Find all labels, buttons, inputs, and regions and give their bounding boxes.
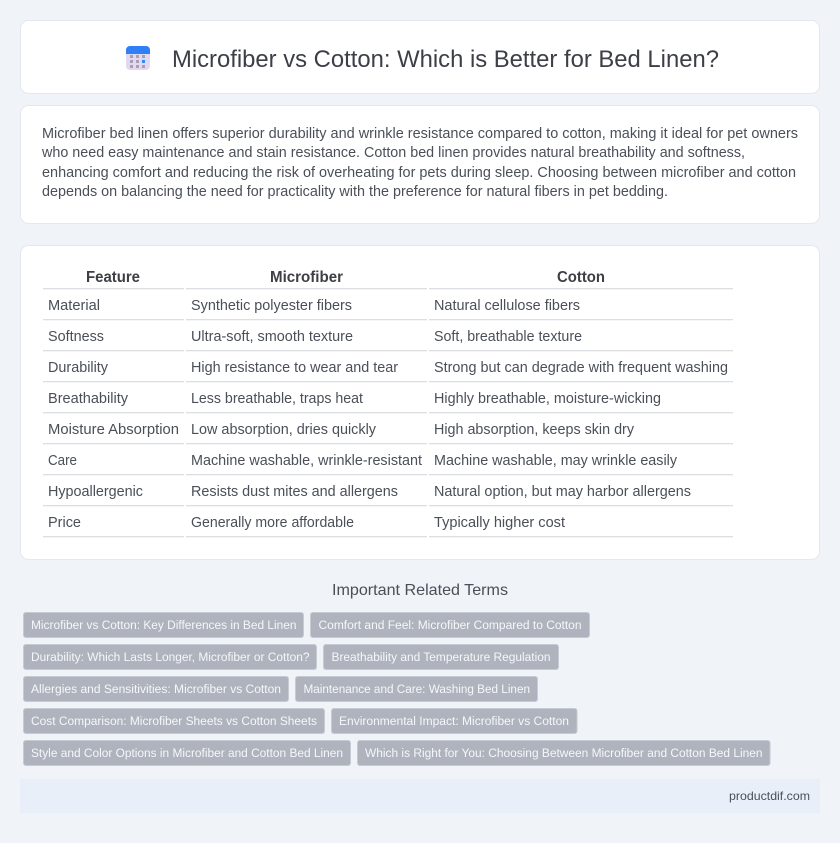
tag <box>332 708 577 734</box>
row: hypoallergenic: Hypoallergenic <box>48 484 143 500</box>
row: care <box>48 453 678 469</box>
tag <box>324 644 558 670</box>
row: breathability: Breathability <box>48 391 129 407</box>
row: durability: Strong but can degrade with frequent washing <box>434 360 728 376</box>
icon: calendar grid <box>126 46 150 70</box>
tag: Allergies and Sensitivities: Microfiber vs Cotton <box>31 682 281 696</box>
footer source: productdif.com <box>729 789 810 803</box>
row: material: Synthetic polyester fibers <box>191 298 352 314</box>
row: care: Machine washable, may wrinkle easily <box>434 453 678 469</box>
table rules <box>43 288 733 537</box>
tag <box>24 740 350 766</box>
row: material: Material <box>48 298 100 314</box>
row: durability: High resistance to wear and tear <box>191 360 398 376</box>
intro paragraph: enhancing comfort and reducing the risk of overheating for pets during sleep. Choosing between microfiber and cotton <box>42 165 796 181</box>
row: care: Machine washable, wrinkle-resistant <box>191 453 422 469</box>
row: material <box>48 298 580 314</box>
row: moisture absorption <box>48 422 635 438</box>
row: price: Generally more affordable <box>191 515 354 531</box>
row: care: Care <box>48 453 77 469</box>
row: softness: Softness <box>48 329 104 345</box>
row: moisture absorption: Moisture Absorption <box>48 422 179 438</box>
row: price <box>48 515 565 531</box>
table header: Feature <box>86 269 140 286</box>
related term tags <box>24 612 770 766</box>
tag <box>296 676 538 702</box>
row: hypoallergenic: Natural option, but may harbor allergens <box>434 484 691 500</box>
tag: Style and Color Options in Microfiber and Cotton Bed Linen <box>31 746 343 760</box>
row: durability: Durability <box>48 360 109 376</box>
row: hypoallergenic <box>48 484 691 500</box>
row: breathability: Highly breathable, moisture-wicking <box>434 391 661 407</box>
tag <box>358 740 770 766</box>
table header <box>86 269 605 286</box>
table header: Cotton <box>557 269 605 286</box>
footer bar <box>20 779 820 813</box>
row: breathability <box>48 391 661 407</box>
intro paragraph <box>41 126 798 200</box>
row: moisture absorption: Low absorption, dries quickly <box>191 422 377 438</box>
table header: Microfiber <box>270 269 343 286</box>
tag: Cost Comparison: Microfiber Sheets vs Cotton Sheets <box>31 714 317 728</box>
tag <box>24 676 288 702</box>
title: Microfiber vs Cotton: Which is Better for Bed Linen? <box>172 46 719 73</box>
tag: Which is Right for You: Choosing Between Microfiber and Cotton Bed Linen <box>365 746 763 760</box>
intro paragraph: Microfiber bed linen offers superior durability and wrinkle resistance compared to cotton, making it ideal for pet owners <box>42 126 798 142</box>
tag <box>310 612 590 638</box>
tag <box>24 644 316 670</box>
row: price: Price <box>48 515 81 531</box>
intro paragraph: who need easy maintenance and stain resistance. Cotton bed linen provides natural breathability and softness, <box>41 145 745 161</box>
row: breathability: Less breathable, traps heat <box>191 391 363 407</box>
row: softness: Soft, breathable texture <box>434 329 582 345</box>
row: price: Typically higher cost <box>434 515 565 531</box>
tag: Durability: Which Lasts Longer, Microfiber or Cotton? <box>31 650 310 664</box>
tag: Microfiber vs Cotton: Key Differences in Bed Linen <box>31 618 297 632</box>
tag: Maintenance and Care: Washing Bed Linen <box>304 682 530 696</box>
heading: related terms: Important Related Terms <box>332 582 508 599</box>
row: moisture absorption: High absorption, keeps skin dry <box>434 422 635 438</box>
row: softness: Ultra-soft, smooth texture <box>191 329 353 345</box>
tag: Breathability and Temperature Regulation <box>332 650 551 664</box>
tag <box>24 612 304 638</box>
row: durability <box>48 360 728 376</box>
panel: header <box>20 20 820 94</box>
intro paragraph: depends on balancing the need for practicality with the preference for natural fibers in pet bedding. <box>42 184 668 200</box>
panel: comparison table <box>20 246 820 560</box>
tag: Environmental Impact: Microfiber vs Cotton <box>339 714 569 728</box>
tag: Comfort and Feel: Microfiber Compared to Cotton <box>318 618 582 632</box>
panel: introduction <box>20 106 820 224</box>
row: hypoallergenic: Resists dust mites and allergens <box>191 484 398 500</box>
tag <box>24 708 324 734</box>
row: softness <box>48 329 582 345</box>
row: material: Natural cellulose fibers <box>434 298 580 314</box>
